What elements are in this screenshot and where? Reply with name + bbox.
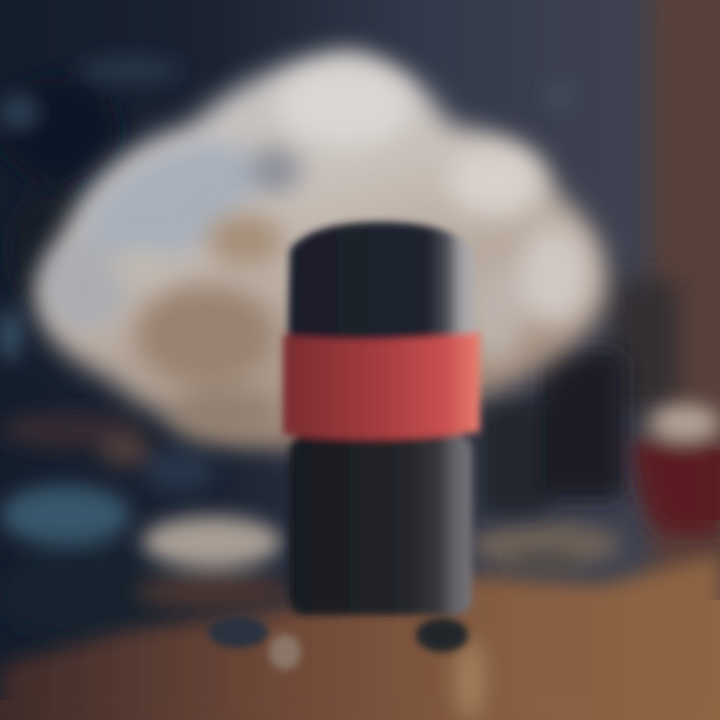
can [283,222,480,615]
background objects: dark jars behind the can [480,350,625,572]
cloud: bright highlights [277,63,593,360]
background: dark bokeh at left [0,58,572,640]
object: red bowl at right [632,404,720,535]
cloud: blue-grey shaded left lobe [43,116,301,331]
can: dark lower body [290,435,472,615]
can: small feet [208,616,468,670]
smoke cloud [38,50,607,450]
table: wood surface [0,523,720,720]
object: white plate at left [135,516,295,610]
cloud: warm tan lower area [106,214,283,441]
background: brown panel at right [610,0,720,420]
can: red band [283,332,480,439]
can: black top section [288,222,476,345]
